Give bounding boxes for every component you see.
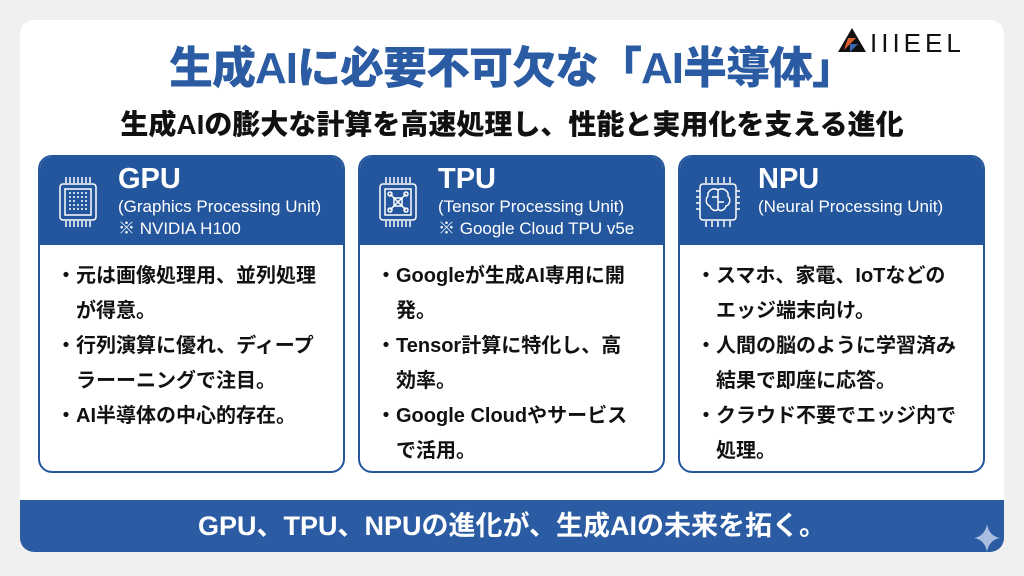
- icon: tensor chip: [379, 177, 417, 227]
- header GPU: ※ NVIDIA H100: [118, 219, 241, 238]
- banner: GPU、TPU、NPUの進化が、生成AIの未来を拓く。: [198, 511, 826, 541]
- subtitle: 生成AIの膨大な計算を高速処理し、性能と実用化を支える進化: [120, 109, 904, 140]
- bullets TPU: 効率。: [396, 370, 456, 392]
- bullets GPU: ・行列演算に優れ、ディープ: [56, 335, 314, 357]
- bullets TPU: ・Tensor計算に特化し、高: [376, 335, 621, 357]
- icon: chip: [59, 177, 97, 227]
- bullets TPU: [376, 264, 627, 462]
- bullets GPU: が得意。: [76, 300, 156, 322]
- bullets NPU: 結果で即座に応答。: [716, 370, 896, 392]
- bullets GPU: [56, 264, 316, 427]
- title: 生成AIに必要不可欠な「AI半導体」: [169, 44, 855, 93]
- bullets NPU: 処理。: [716, 440, 776, 462]
- header GPU: [40, 157, 343, 245]
- panel: TPU: [358, 155, 665, 473]
- banner: [20, 500, 1004, 552]
- header NPU: NPU: [758, 163, 819, 195]
- header TPU: ※ Google Cloud TPU v5e: [438, 219, 634, 238]
- logo: IIIEEL: [870, 28, 965, 58]
- header GPU: (Graphics Processing Unit): [118, 197, 321, 216]
- bullets TPU: 発。: [396, 300, 436, 322]
- bullets NPU: ・クラウド不要でエッジ内で: [696, 405, 956, 427]
- header TPU: TPU: [438, 163, 496, 195]
- icon: brain chip: [696, 177, 740, 227]
- icon: sparkle: [974, 524, 1000, 552]
- bullets TPU: で活用。: [396, 440, 476, 462]
- panel: NPU: [678, 155, 985, 473]
- bullets NPU: エッジ端末向け。: [716, 300, 875, 322]
- bullets GPU: ラーーニングで注目。: [76, 370, 276, 392]
- bullets TPU: ・Googleが生成AI専用に開: [376, 265, 625, 287]
- bullets GPU: ・AI半導体の中心的存在。: [56, 405, 296, 427]
- bullets NPU: ・人間の脳のように学習済み: [696, 335, 956, 357]
- header NPU: [680, 157, 983, 245]
- bullets GPU: ・元は画像処理用、並列処理: [56, 265, 316, 287]
- bullets TPU: ・Google Cloudやサービス: [376, 405, 627, 427]
- header GPU: GPU: [118, 163, 181, 195]
- bullets NPU: [696, 264, 956, 462]
- panel: GPU: [38, 155, 345, 473]
- header NPU: (Neural Processing Unit): [758, 197, 943, 216]
- bullets NPU: ・スマホ、家電、IoTなどの: [696, 265, 945, 287]
- header TPU: (Tensor Processing Unit): [438, 197, 624, 216]
- header TPU: [360, 157, 663, 245]
